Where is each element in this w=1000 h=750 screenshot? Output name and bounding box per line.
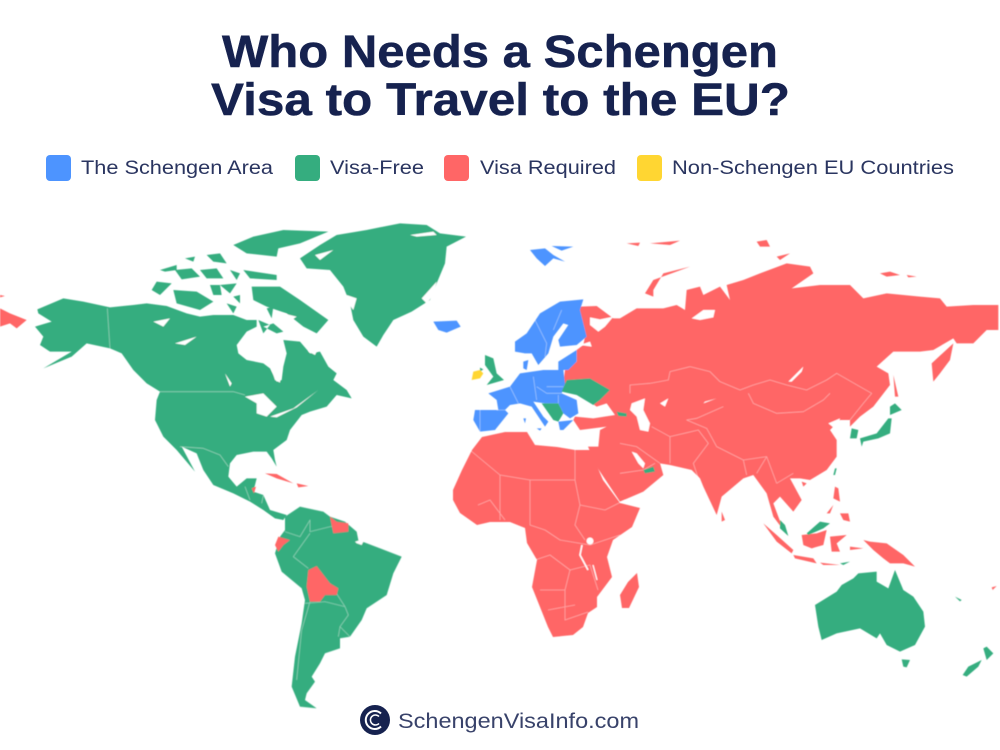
logo: SchengenVisaInfo.com: SchengenVisaInfo.com <box>398 710 639 733</box>
icon: C mark <box>360 705 390 735</box>
South America visa-free countries <box>275 507 402 708</box>
legend item: The Schengen Area: The Schengen Area <box>81 158 273 179</box>
legend item: Visa-Free: Visa-Free <box>330 158 424 179</box>
world map <box>0 223 998 708</box>
Schengen Area countries <box>433 246 587 432</box>
title: Visa to Travel to the EU? <box>211 74 790 125</box>
visa-required countries in South America <box>275 517 348 602</box>
legend item: Non-Schengen EU Countries: Non-Schengen EU Countries <box>672 158 954 179</box>
map: Russia, Asia and Middle East, visa required <box>563 240 998 677</box>
legend item: Visa-Free <box>295 155 424 181</box>
map: North America and Greenland, visa-free <box>0 223 466 520</box>
title <box>211 26 790 125</box>
legend item: Non-Schengen EU Countries <box>637 155 954 181</box>
legend <box>46 155 954 181</box>
legend item: The Schengen Area <box>46 155 273 181</box>
legend item: Visa Required: Visa Required <box>480 158 616 179</box>
map: South America <box>275 507 402 708</box>
logo: SchengenVisaInfo.com <box>360 705 639 735</box>
title: Who Needs a Schengen <box>222 26 778 77</box>
Ireland, non-Schengen EU <box>472 370 483 380</box>
map: Africa, visa required <box>453 432 640 637</box>
legend item: Visa Required <box>444 155 616 181</box>
visa-free European countries: UK, Ukraine, Balkans <box>480 355 610 422</box>
map: Europe <box>433 246 610 432</box>
